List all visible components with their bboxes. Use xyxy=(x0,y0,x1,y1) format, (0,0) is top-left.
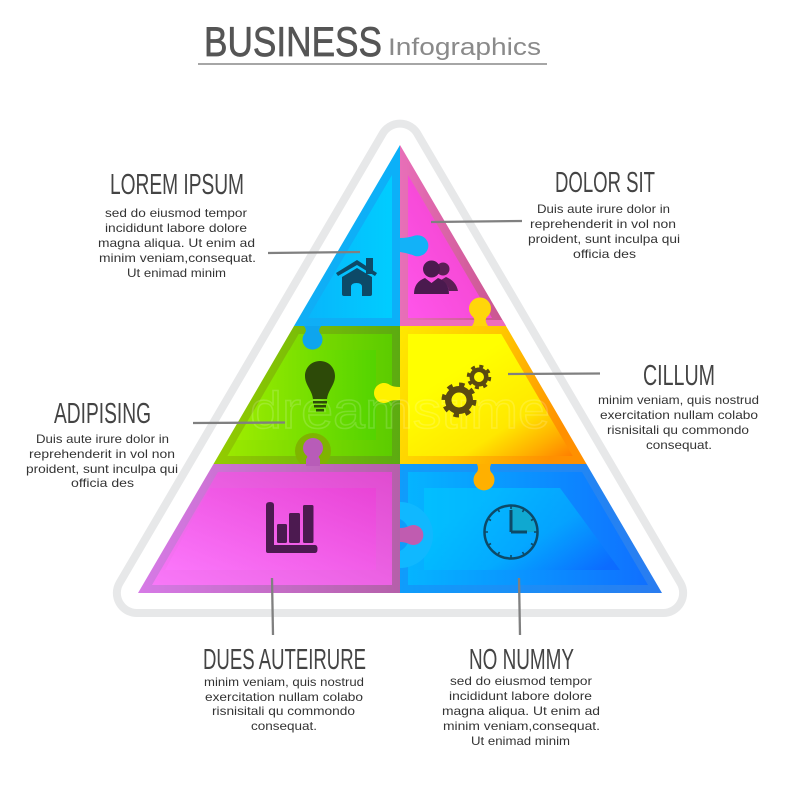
title underline xyxy=(198,63,547,65)
panel: middle left green piece xyxy=(214,326,400,469)
watermark: dreamstime xyxy=(250,382,550,440)
text block: dues auteirure: exercitation nullam colabo xyxy=(205,690,363,704)
text block: no nummy: NO NUMMY xyxy=(469,644,574,676)
text block: cillum: minim veniam, quis nostrud xyxy=(598,393,759,407)
text block: dolor sit: proident, sunt inculpa qui xyxy=(528,232,680,246)
panel: middle right yellow piece xyxy=(400,326,586,464)
title: business: BUSINESS xyxy=(204,18,382,65)
text block: lorem ipsum xyxy=(98,169,256,280)
text block: lorem ipsum: Ut enimad minim xyxy=(127,266,226,280)
puzzle tab: magenta into green xyxy=(303,438,323,466)
puzzle tab: magenta into blue xyxy=(400,525,423,545)
text block: no nummy: Ut enimad minim xyxy=(471,734,570,748)
text block: no nummy xyxy=(442,644,600,748)
text block: dues auteirure: DUES AUTEIRURE xyxy=(203,644,366,676)
text block: dolor sit: reprehenderit in vol non xyxy=(530,217,676,231)
icon: light bulb xyxy=(305,361,335,412)
text block: dues auteirure xyxy=(203,644,366,733)
text block: cillum: CILLUM xyxy=(643,360,715,392)
puzzle tab: orange into blue xyxy=(473,464,494,490)
text block: dolor sit: Duis aute irure dolor in xyxy=(537,202,670,216)
connector: no nummy xyxy=(519,578,520,635)
text block: adipising: Duis aute irure dolor in xyxy=(36,432,169,446)
text block: dues auteirure: minim veniam, quis nostrud xyxy=(204,675,364,689)
text block: dolor sit xyxy=(528,167,680,261)
icon: house xyxy=(336,258,377,296)
text block: adipising xyxy=(26,398,178,490)
text block: no nummy: magna aliqua. Ut enim ad xyxy=(442,704,600,718)
text block: cillum xyxy=(598,360,759,452)
pyramid puzzle xyxy=(138,145,662,593)
text block: dolor sit: DOLOR SIT xyxy=(555,167,655,199)
text block: no nummy: incididunt labore dolore xyxy=(449,689,592,703)
text block: dolor sit: officia des xyxy=(573,247,636,261)
title: infographics: Infographics xyxy=(388,34,541,61)
text block: dues auteirure: risnisitali qu commondo xyxy=(212,704,355,718)
icon: gears xyxy=(444,366,490,416)
text block: lorem ipsum: minim veniam,consequat. xyxy=(99,251,256,265)
title xyxy=(198,18,547,65)
text block: adipising: proident, sunt inculpa qui xyxy=(26,462,178,476)
puzzle tab: yellow into pink xyxy=(469,298,491,326)
icon: clock xyxy=(484,506,538,558)
text block: no nummy: sed do eiusmod tempor xyxy=(450,674,592,688)
connector: lorem ipsum xyxy=(268,252,360,253)
text block: lorem ipsum: magna aliqua. Ut enim ad xyxy=(98,236,255,250)
pyramid outer outline xyxy=(117,124,683,613)
panel: top right pink piece xyxy=(400,145,506,326)
text block: dues auteirure: consequat. xyxy=(251,719,317,733)
text block: cillum: risnisitali qu commondo xyxy=(607,423,749,437)
text block: cillum: consequat. xyxy=(646,438,712,452)
text block: lorem ipsum: sed do eiusmod tempor xyxy=(105,206,247,220)
text block: adipising: reprehenderit in vol non xyxy=(29,447,175,461)
puzzle tab: blue into green xyxy=(302,326,322,350)
icon: people xyxy=(414,260,458,294)
panel: top left blue piece xyxy=(294,145,400,326)
text block: lorem ipsum: LOREM IPSUM xyxy=(110,169,244,201)
puzzle tab: yellow into green xyxy=(374,383,400,403)
text block: adipising: ADIPISING xyxy=(54,398,151,430)
text block: no nummy: minim veniam,consequat. xyxy=(443,719,600,733)
puzzle tab: blue into pink xyxy=(400,235,428,256)
text block: lorem ipsum: incididunt labore dolore xyxy=(105,221,247,235)
icon: bar chart xyxy=(266,502,318,553)
text block: cillum: exercitation nullam colabo xyxy=(600,408,758,422)
panel: bottom left magenta piece xyxy=(138,464,400,593)
connector: dues auteirure xyxy=(272,578,273,635)
connector: dolor sit xyxy=(431,221,522,222)
connector: cillum xyxy=(508,372,600,375)
panel: bottom right blue piece xyxy=(400,464,662,593)
text block: adipising: officia des xyxy=(71,476,134,490)
connector: adipising xyxy=(193,421,285,424)
